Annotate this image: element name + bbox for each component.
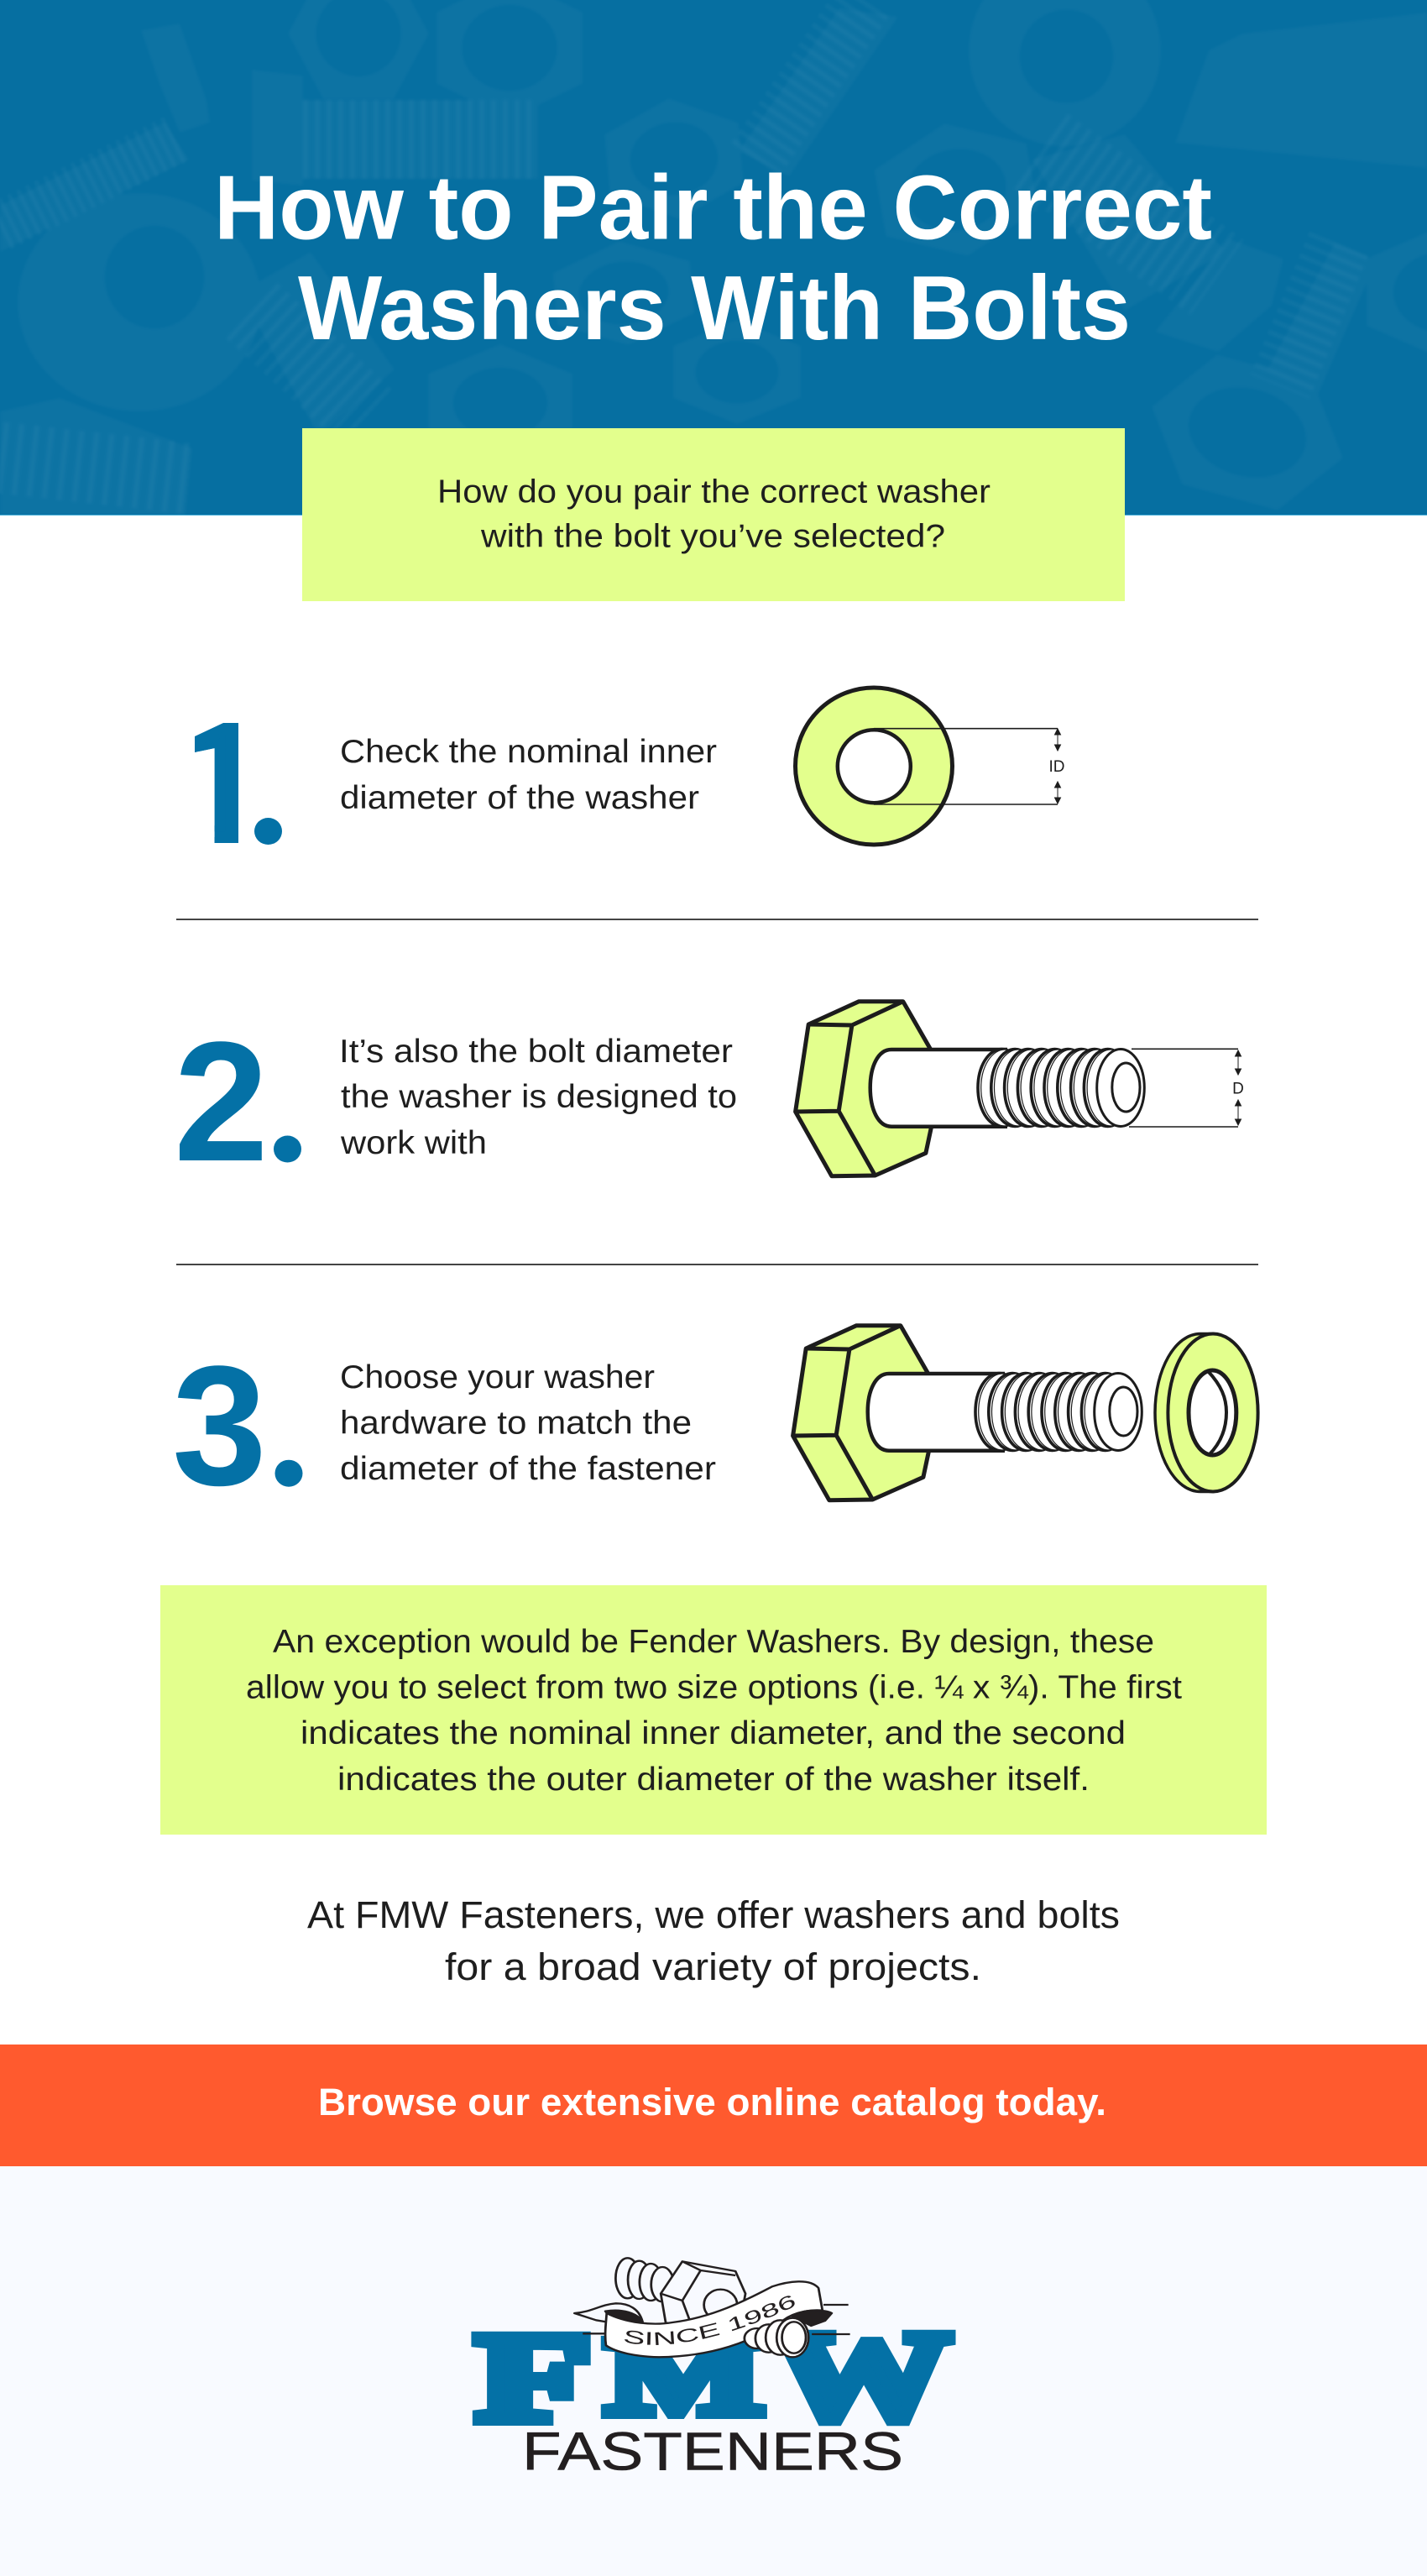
logo: FMW Fasteners: SINCE 1986 — [625, 2296, 795, 2345]
title: How to Pair the Correct — [214, 156, 1212, 259]
divider — [176, 1264, 1258, 1265]
step 3 text: diameter of the fastener — [340, 1451, 716, 1487]
step 3 number — [172, 1280, 321, 1542]
panel: fender washer exception: An exception would be Fender Washers. By design, these — [273, 1624, 1154, 1660]
step 2 number: 2 — [174, 1007, 269, 1197]
step 1 number: . — [235, 637, 301, 899]
call to action band: Browse our extensive online catalog today. — [318, 2081, 1106, 2123]
step 1 text: Check the nominal inner — [340, 734, 717, 770]
divider — [176, 919, 1258, 920]
step 3 number: 3 — [172, 1331, 267, 1521]
logo: FMW Fasteners — [471, 2257, 956, 2482]
icon: bolt diameter — [796, 1002, 1244, 1176]
panel: intro question — [302, 428, 1125, 601]
panel: intro question: with the bolt you’ve selected? — [480, 519, 945, 554]
icon: bolt diameter: D — [1232, 1080, 1244, 1098]
step 3 text: hardware to match the — [340, 1406, 692, 1441]
step 1 text — [340, 734, 717, 816]
closing text — [307, 1893, 1120, 1988]
step 1 number: 1 — [180, 689, 274, 880]
header photo banner — [0, 0, 1427, 523]
logo: FMW Fasteners: FASTENERS — [522, 2422, 903, 2482]
step 2 text — [339, 1034, 737, 1161]
step 3 text: Choose your washer — [340, 1359, 655, 1395]
call to action band — [0, 2045, 1427, 2166]
step 3 number: . — [256, 1280, 321, 1542]
logo: FMW Fasteners: F — [477, 2308, 591, 2448]
step 3 text — [340, 1359, 716, 1487]
logo: FMW Fasteners: W — [774, 2306, 950, 2446]
icon: washer inner diameter: ID — [1049, 758, 1064, 776]
step 2 text: It’s also the bolt diameter — [339, 1034, 733, 1070]
closing text: for a broad variety of projects. — [445, 1945, 981, 1988]
step 2 number: . — [255, 956, 320, 1217]
step 2 number — [174, 956, 320, 1217]
icon: washer inner diameter — [796, 688, 1064, 845]
footer background — [0, 2166, 1427, 2576]
closing text: At FMW Fasteners, we offer washers and bolts — [307, 1893, 1120, 1936]
icon: bolt and washer — [793, 1326, 1258, 1500]
step 2 text: work with — [340, 1125, 487, 1161]
panel: fender washer exception: indicates the outer diameter of the washer itself. — [337, 1762, 1090, 1798]
panel: intro question: How do you pair the correct washer — [437, 474, 991, 510]
step 1 text: diameter of the washer — [340, 780, 699, 816]
panel: fender washer exception: indicates the nominal inner diameter, and the second — [301, 1715, 1126, 1751]
title: Washers With Bolts — [298, 257, 1131, 359]
panel: fender washer exception: allow you to select from two size options (i.e. ¼ x ¾). The first — [246, 1669, 1182, 1706]
panel: fender washer exception — [160, 1585, 1267, 1835]
title — [214, 156, 1212, 359]
step 1 number — [180, 637, 301, 899]
step 2 text: the washer is designed to — [341, 1079, 737, 1115]
logo: FMW Fasteners: M — [607, 2317, 763, 2437]
